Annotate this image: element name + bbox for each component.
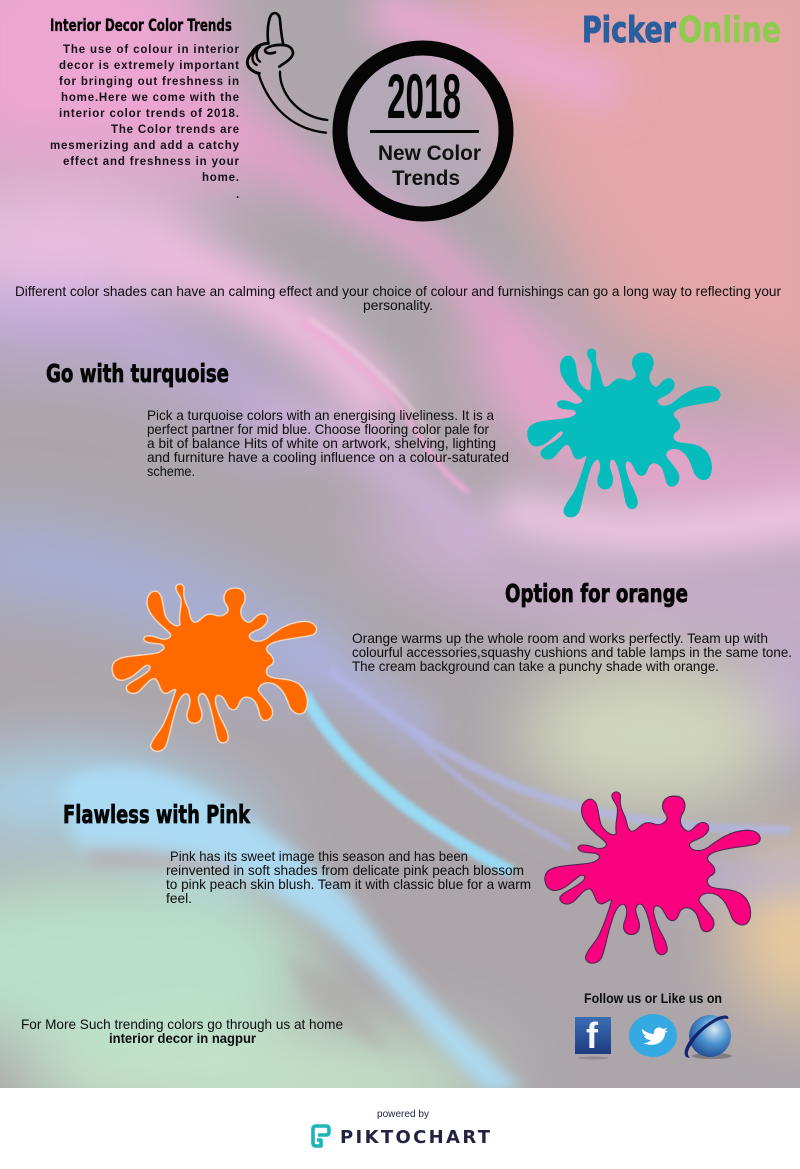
- intro paragraph: home.Here we come with the: [61, 92, 239, 104]
- text: turquoise description: scheme.: [147, 463, 195, 479]
- text: orange description: The cream background can take a punchy shade with orange.: [352, 658, 719, 674]
- text: turquoise description: a bit of balance Hits of white on artwork, shelving, lighting: [147, 435, 496, 451]
- section: orange: [112, 579, 792, 751]
- footer: powered by Piktochart: [0, 1088, 800, 1169]
- text: pink description: [166, 848, 531, 906]
- text: orange description: Orange warms up the whole room and works perfectly. Team up with: [352, 630, 768, 646]
- icon: turquoise paint splat: [528, 349, 720, 517]
- badge: 2018 New Color Trends: 2018: [387, 62, 461, 132]
- icon: pink paint splat: [545, 792, 760, 963]
- intro paragraph: interior color trends of 2018.: [59, 108, 239, 120]
- icon: Piktochart mark: [313, 1126, 329, 1146]
- badge: 2018 New Color Trends: [340, 48, 506, 214]
- icon: twitter: [629, 1014, 677, 1057]
- icon: facebook: f: [586, 1015, 599, 1056]
- text: orange description: colourful accessories,squashy cushions and table lamps in the same tone.: [352, 644, 792, 660]
- footer: powered by Piktochart: PIKTOCHART: [340, 1127, 491, 1148]
- intro paragraph: for bringing out freshness in: [59, 76, 239, 88]
- intro paragraph: .: [236, 189, 239, 201]
- heading: Option for orange: Option for orange: [505, 579, 688, 608]
- text: pink description: reinvented in soft shades from delicate pink peach blossom: [166, 862, 524, 878]
- text: pink description: to pink peach skin blush. Team it with classic blue for a warm: [166, 876, 531, 892]
- intro paragraph: home.: [202, 172, 239, 184]
- social block: [575, 990, 732, 1060]
- icon: pointing hand: [247, 13, 327, 133]
- heading: follow us: Follow us or Like us on: [584, 990, 722, 1006]
- section: turquoise: [46, 349, 720, 517]
- intro statement: [15, 283, 781, 313]
- heading: Flawless with Pink: Flawless with Pink: [63, 800, 251, 829]
- icon: facebook: [575, 1015, 611, 1060]
- intro paragraph: mesmerizing and add a catchy: [50, 140, 240, 152]
- call to action: For More Such trending colors go through us at home: [21, 1016, 343, 1032]
- intro paragraph: The Color trends are: [111, 124, 239, 136]
- section: pink: [63, 792, 760, 963]
- text: pink description: Pink has its sweet image this season and has been: [170, 848, 468, 864]
- intro paragraph: [50, 44, 240, 201]
- text: turquoise description: perfect partner for mid blue. Choose flooring color pale for: [147, 421, 489, 437]
- call to action: [21, 1016, 343, 1046]
- logo: PickerOnline: [582, 10, 781, 51]
- text: turquoise description: Pick a turquoise colors with an energising liveliness. It is a: [147, 407, 494, 423]
- text: pink description: feel.: [166, 890, 192, 906]
- footer: powered by Piktochart: powered by: [377, 1109, 429, 1120]
- call to action: interior decor in nagpur: [109, 1030, 257, 1046]
- heading: Interior Decor Color Trends: Interior Decor Color Trends: [50, 16, 232, 36]
- icon: globe: [685, 1015, 732, 1059]
- intro paragraph: effect and freshness in your: [63, 156, 240, 168]
- logo: PickerOnline: Picker: [582, 10, 676, 51]
- badge: 2018 New Color Trends: New Color: [378, 142, 481, 165]
- heading: Go with turquoise: Go with turquoise: [46, 359, 229, 388]
- text: orange description: [352, 630, 792, 674]
- intro paragraph: decor is extremely important: [59, 60, 239, 72]
- intro statement: personality.: [363, 297, 433, 313]
- badge: 2018 New Color Trends: Trends: [392, 167, 460, 190]
- text: turquoise description: [147, 407, 509, 479]
- hero text block: title and introduction: [50, 16, 240, 201]
- intro statement: Different color shades can have an calming effect and your choice of colour and furnishings can go a long way to reflecting your: [15, 283, 781, 299]
- intro paragraph: The use of colour in interior: [63, 44, 240, 56]
- text: turquoise description: and furniture have a cooling influence on a colour-saturated: [147, 449, 509, 465]
- icon: orange paint splat: [112, 584, 317, 751]
